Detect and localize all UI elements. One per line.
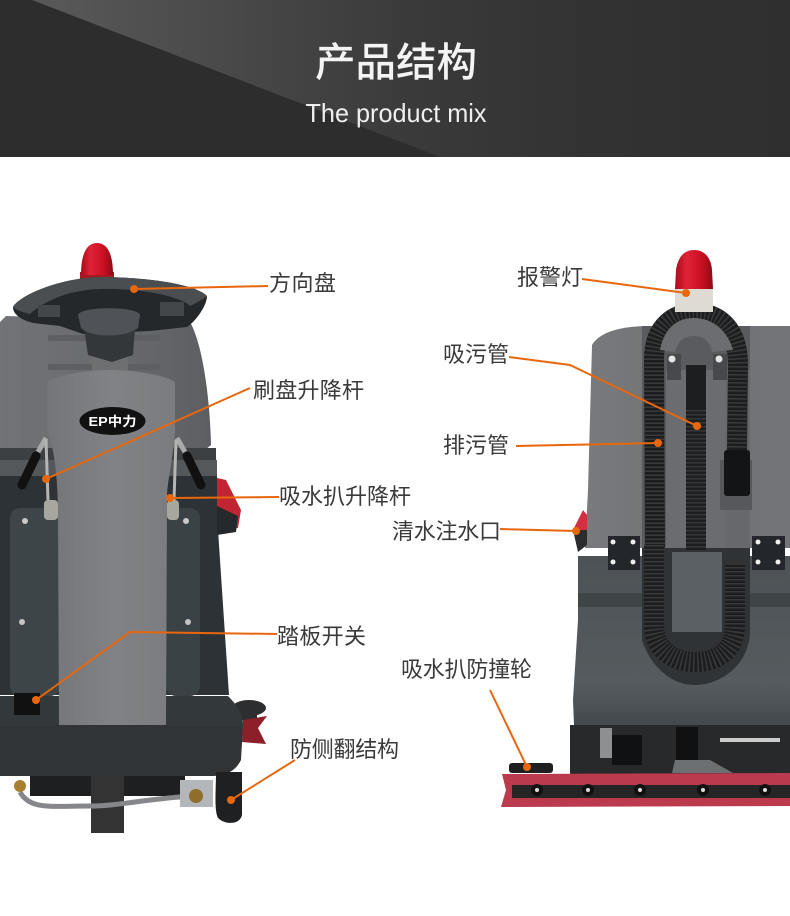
- red button: [217, 478, 241, 535]
- callout: 踏板开关: 踏板开关: [277, 624, 366, 649]
- rear wheel: [232, 700, 267, 744]
- body shroud: [0, 448, 229, 696]
- callout: 防侧翻结构: [227, 737, 399, 804]
- beacon light: [80, 243, 114, 280]
- callout: 吸水扒升降杆: 吸水扒升降杆: [279, 484, 411, 509]
- brand logo: EP中力: [88, 414, 136, 429]
- underside brush block: [30, 776, 185, 833]
- callout: 清水注水口: [392, 519, 580, 544]
- squeegee: [501, 773, 790, 807]
- callout: 防侧翻结构: 防侧翻结构: [290, 737, 399, 762]
- subtitle: The product mix: [306, 98, 486, 128]
- header banner: [0, 0, 790, 157]
- callout: 清水注水口: 清水注水口: [392, 519, 501, 544]
- pedal switch: [14, 693, 40, 715]
- seat back: [0, 316, 211, 450]
- arch guard: [660, 318, 733, 380]
- callout: 吸水扒防撞轮: [401, 657, 532, 771]
- lever right: [167, 438, 201, 520]
- rear channel: [642, 326, 752, 550]
- brand logo: [80, 407, 146, 435]
- anti-tip wheel: [216, 772, 242, 823]
- clip right: [752, 536, 785, 570]
- lower body: [573, 548, 790, 725]
- callout: 报警灯: 报警灯: [517, 265, 583, 290]
- callout: 报警灯: [517, 265, 690, 297]
- callout: 吸水扒升降杆: [166, 484, 411, 509]
- callout: 刷盘升降杆: [42, 378, 364, 483]
- undercarriage: [570, 725, 790, 775]
- tank: [585, 326, 790, 548]
- callout: 吸污管: 吸污管: [443, 342, 509, 367]
- right machine: rear view: [501, 250, 790, 807]
- callout: 排污管: 排污管: [443, 433, 509, 458]
- callout: 吸污管: [443, 342, 701, 430]
- title: 产品结构: [315, 41, 477, 85]
- hose: [14, 780, 213, 807]
- platform and bumper: [0, 696, 243, 776]
- callout: 排污管: [443, 433, 662, 458]
- callout: 方向盘: [130, 271, 336, 296]
- hose coupling: [724, 450, 750, 496]
- callout: 刷盘升降杆: 刷盘升降杆: [253, 378, 364, 403]
- steering wheel: [13, 277, 207, 334]
- lever left: [22, 438, 58, 520]
- steering column: [78, 308, 140, 372]
- callout: 吸水扒防撞轮: 吸水扒防撞轮: [401, 657, 532, 682]
- clip left: [608, 536, 640, 570]
- hoses: [654, 313, 738, 662]
- bumper wheel: [509, 763, 553, 773]
- central column: [47, 370, 175, 725]
- top beacon: [675, 250, 713, 312]
- side red button: [573, 510, 587, 552]
- callout: 踏板开关: [32, 624, 366, 704]
- callout: 方向盘: 方向盘: [269, 271, 336, 296]
- left machine: front view: [0, 243, 267, 833]
